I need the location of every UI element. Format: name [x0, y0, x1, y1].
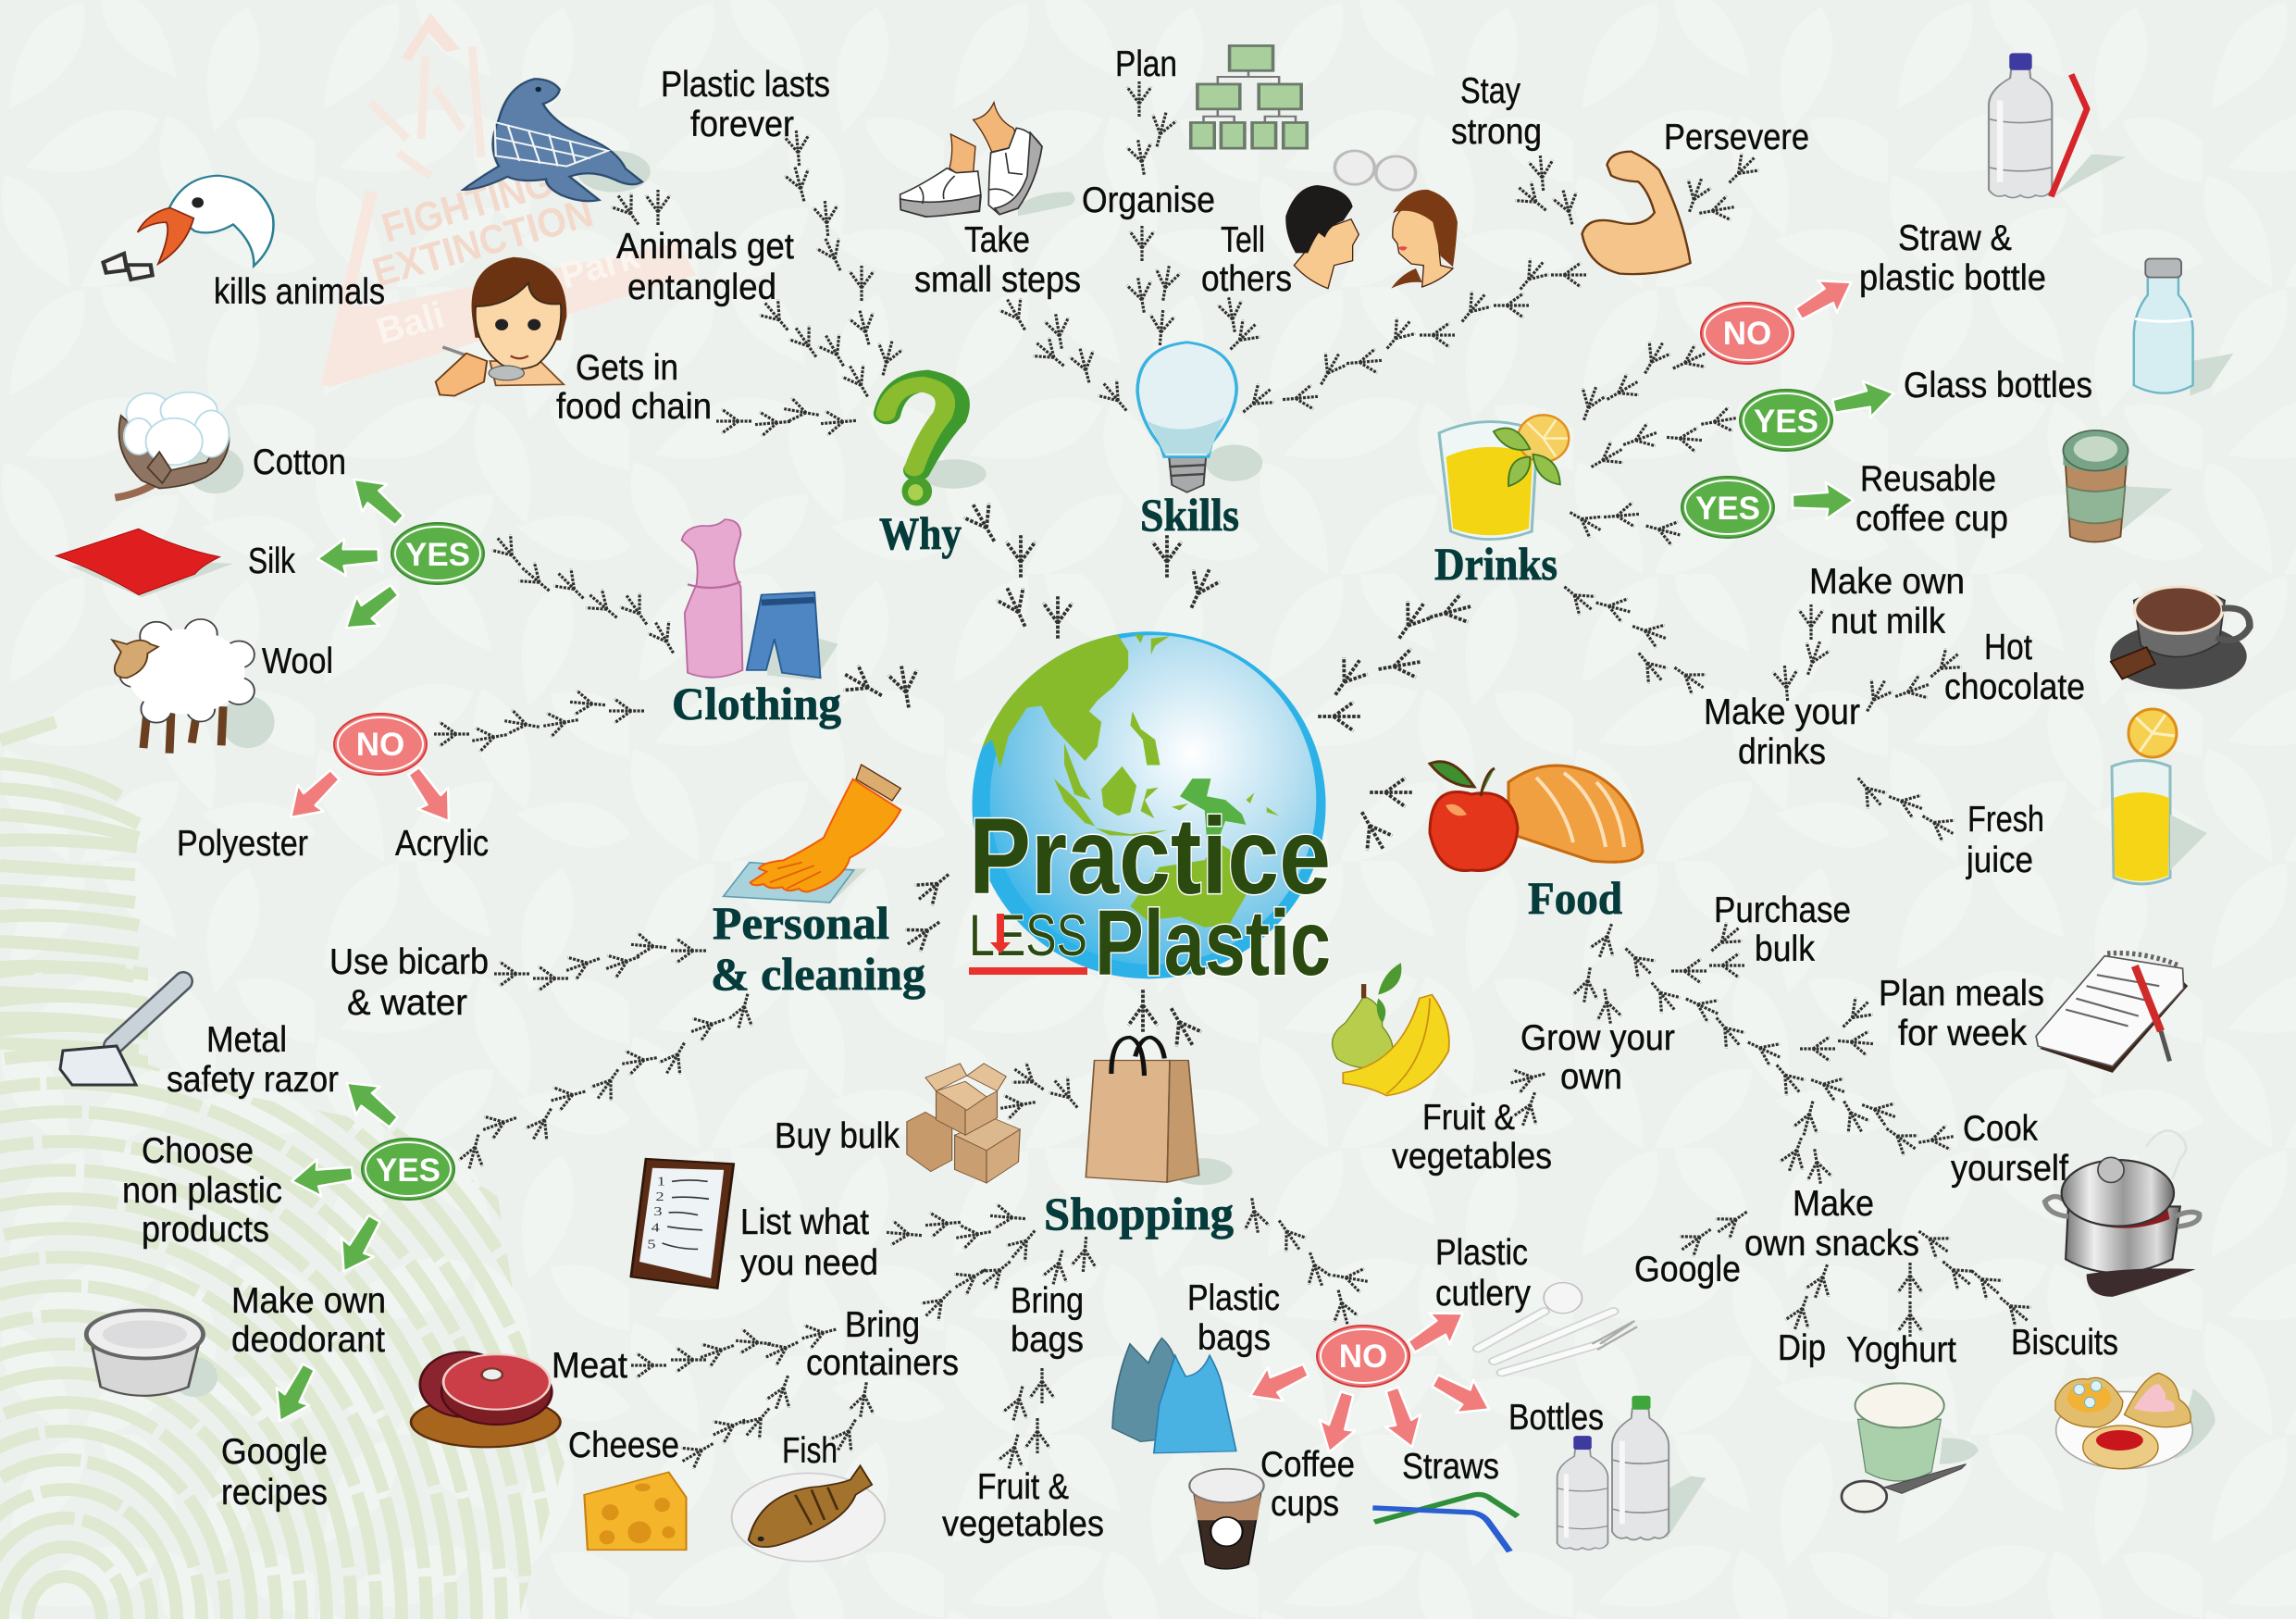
heading: Why: Why	[879, 507, 962, 559]
icon: cooking pot	[2045, 1131, 2200, 1297]
heading: Food: Food	[1528, 872, 1622, 924]
badge: yes	[391, 523, 484, 584]
labels: personal and cleaning: recipes	[221, 1473, 328, 1513]
icon: two people talking	[1285, 185, 1458, 289]
labels: shopping: vegetables	[942, 1504, 1104, 1544]
heading: Drinks: Drinks	[1434, 538, 1558, 590]
heading: Personal and cleaning: Personal	[713, 897, 889, 949]
labels: personal and cleaning: products	[142, 1210, 269, 1250]
labels: skills: Take	[964, 220, 1030, 260]
arrows and badges: personal care	[264, 1068, 454, 1430]
labels: personal and cleaning: Use bicarb	[329, 942, 489, 982]
labels: food: Purchase	[1714, 890, 1851, 930]
icon: paper shopping bag	[1086, 1038, 1233, 1185]
park logo watermark: FIGHTING	[377, 159, 558, 252]
label: animals get entangled: entangled	[627, 268, 776, 307]
icon: clipboard list: 5	[647, 1236, 656, 1252]
labels: skills: Persevere	[1664, 118, 1809, 157]
icon: organisation chart	[1191, 45, 1307, 148]
labels: drinks: chocolate	[1944, 667, 2085, 707]
heading: Personal and cleaning	[711, 897, 925, 1000]
labels: food: vegetables	[1392, 1137, 1552, 1177]
icon: drinks glass	[1439, 415, 1569, 540]
labels: shopping	[552, 1116, 1604, 1544]
footprints: drinks branches	[1557, 337, 1966, 844]
labels: skills: strong	[1451, 112, 1542, 152]
labels: drinks: Glass bottles	[1904, 366, 2092, 405]
labels: shopping: containers	[806, 1343, 959, 1383]
label: plastic lasts forever: Plastic lasts	[661, 65, 830, 105]
footprints: skills branches	[997, 81, 1763, 421]
labels: shopping: Plastic	[1187, 1278, 1280, 1318]
labels: personal and cleaning: safety razor	[167, 1060, 339, 1100]
footprints: why branches	[608, 130, 903, 437]
labels: food: Google	[1634, 1250, 1741, 1289]
labels: shopping: Bring	[845, 1305, 920, 1345]
footprints: clothing branches	[434, 530, 684, 753]
labels: clothing: Polyester	[177, 824, 308, 864]
heading: Personal and cleaning: & cleaning	[711, 948, 925, 1000]
labels: personal and cleaning: deodorant	[231, 1320, 385, 1360]
labels: drinks: Reusable	[1860, 459, 1996, 499]
title: Practice: Practice	[969, 795, 1331, 916]
arrow to acrylic	[399, 760, 464, 832]
icon: glass milk bottle	[2134, 259, 2233, 396]
label: kills animals: kills animals	[214, 272, 385, 312]
icon: disposable coffee cup	[1189, 1469, 1264, 1569]
labels: personal and cleaning	[122, 942, 489, 1513]
arrow to polyester	[278, 762, 348, 830]
labels: food: Plan meals	[1879, 974, 2044, 1014]
fingerprint watermark	[0, 722, 627, 1619]
labels: shopping: bags	[1011, 1320, 1084, 1360]
labels: clothing: Silk	[248, 542, 295, 581]
labels: shopping: Bottles	[1508, 1398, 1604, 1438]
label: animals get entangled: Animals get	[616, 227, 794, 267]
globe sphere	[972, 631, 1326, 978]
badge: no: NO	[1723, 316, 1771, 352]
labels: why	[214, 65, 830, 427]
arrow to straw	[1789, 267, 1861, 330]
labels: personal and cleaning: Make own	[231, 1281, 386, 1321]
icon: cardboard boxes	[907, 1064, 1020, 1183]
arrow to cutlery	[1401, 1298, 1473, 1363]
labels: food: Grow your	[1520, 1018, 1675, 1058]
labels: shopping: Coffee	[1260, 1445, 1355, 1485]
arrow to coffee cup	[1793, 481, 1854, 520]
labels: shopping: Buy bulk	[775, 1116, 900, 1156]
icon: seal in net	[464, 79, 651, 201]
icon: plastic bottle and straw	[1989, 53, 2127, 198]
labels: personal and cleaning: non plastic	[122, 1171, 282, 1211]
badge: yes lower	[1682, 477, 1774, 538]
labels: personal and cleaning: & water	[347, 983, 467, 1023]
icon: straws	[1372, 1494, 1518, 1551]
label: plastic lasts forever	[661, 65, 830, 144]
icon: biscuits	[2055, 1373, 2215, 1469]
icon: yoghurt	[1842, 1383, 1979, 1512]
labels: drinks: drinks	[1738, 732, 1826, 772]
icon: deodorant jar	[86, 1311, 217, 1397]
labels: skills: others	[1201, 259, 1292, 299]
labels: drinks	[1704, 218, 2092, 880]
arrow to deodorant	[328, 1209, 391, 1281]
footprints: personal and cleaning branches	[458, 932, 759, 1172]
labels: skills: small steps	[914, 260, 1081, 300]
labels: food: yourself	[1951, 1149, 2068, 1189]
label: gets in food chain: Gets in	[576, 348, 678, 388]
badge: yes	[362, 1139, 454, 1200]
badge: no	[334, 714, 427, 775]
labels: food: Dip	[1778, 1328, 1826, 1368]
labels: skills	[914, 44, 1809, 300]
arrow to cotton	[341, 466, 412, 534]
labels: personal and cleaning: Choose	[142, 1131, 254, 1171]
badge: yes upper	[1740, 390, 1832, 451]
icon: pear and bananas	[1333, 963, 1449, 1096]
labels: food: for week	[1898, 1014, 2027, 1053]
labels: food: Yoghurt	[1846, 1330, 1956, 1370]
icon: speech bubbles	[1334, 151, 1416, 190]
footprints: shopping branches	[631, 1059, 1370, 1472]
icon: clipboard list: 3	[653, 1203, 663, 1219]
labels: shopping: List what	[740, 1202, 869, 1242]
labels: shopping: bags	[1198, 1318, 1271, 1358]
icon: plastic bottles	[1558, 1396, 1706, 1550]
labels: food: bulk	[1755, 929, 1815, 969]
label: gets in food chain: food chain	[556, 387, 712, 427]
arrow to glass bottles	[1831, 376, 1897, 424]
title: Plastic: Plastic	[1095, 891, 1331, 995]
badge: no: NO	[356, 727, 404, 763]
heading: Shopping: Shopping	[1044, 1188, 1234, 1239]
continents	[982, 634, 1279, 928]
icon: boy eating	[436, 257, 566, 396]
labels: drinks: juice	[1966, 841, 2033, 880]
icon: reusable coffee cup	[2063, 430, 2173, 542]
arrows and badges: shopping	[1243, 1298, 1498, 1457]
labels: food: Cook	[1963, 1109, 2038, 1149]
labels: shopping: cutlery	[1435, 1274, 1531, 1314]
labels: shopping: you need	[740, 1243, 878, 1283]
labels: clothing: Wool	[262, 641, 333, 681]
labels: shopping: Cheese	[568, 1426, 679, 1465]
badge: no: NO	[1339, 1339, 1387, 1375]
labels: food: own	[1560, 1057, 1622, 1097]
labels: shopping: Straws	[1402, 1447, 1499, 1487]
badge: no	[1317, 1326, 1409, 1387]
arrow to plastic bags	[1243, 1353, 1313, 1413]
arrow to recipes	[264, 1358, 325, 1430]
labels: skills: Organise	[1082, 181, 1215, 220]
labels: clothing: Cotton	[253, 442, 346, 482]
footprints: hub to globe	[838, 497, 1474, 1052]
labels: drinks: Make own	[1809, 562, 1965, 602]
arrow to razor	[335, 1068, 405, 1137]
icon: flexed arm	[1582, 152, 1691, 274]
icon: clipboard list: 4	[652, 1220, 660, 1235]
icon: fish on plate	[732, 1465, 885, 1562]
labels: shopping: cups	[1271, 1484, 1339, 1524]
labels: shopping: Meat	[552, 1346, 627, 1386]
icon: silk cloth	[56, 529, 233, 597]
arrow to bottles	[1426, 1364, 1498, 1426]
title: LESS with arrow and underline: LESS	[969, 903, 1087, 968]
labels: drinks: nut milk	[1831, 602, 1945, 641]
arrows and badges: drinks	[1682, 267, 1897, 538]
labels: drinks: plastic bottle	[1859, 258, 2046, 298]
island fingerprint	[1180, 778, 1246, 842]
footprints: food branches	[1508, 919, 2035, 1337]
labels: shopping: Bring	[1011, 1281, 1084, 1321]
labels: food: Biscuits	[2011, 1323, 2118, 1363]
label: animals get entangled	[616, 227, 794, 307]
icon: sheep	[112, 619, 275, 753]
icon: apple and bread	[1430, 762, 1643, 870]
badge: yes upper: YES	[1754, 404, 1818, 440]
icon: meat on board	[411, 1351, 560, 1447]
arrow to non plastic products	[290, 1155, 354, 1200]
labels: personal and cleaning: Google	[221, 1432, 328, 1472]
labels: drinks: Make your	[1704, 692, 1860, 732]
heading: Clothing: Clothing	[672, 678, 841, 729]
icon: gull	[104, 176, 274, 280]
labels: clothing	[177, 442, 489, 864]
labels: personal and cleaning: Metal	[206, 1020, 287, 1060]
labels: clothing: Acrylic	[395, 824, 489, 864]
badge: no	[1701, 303, 1793, 364]
labels: shopping: Plastic	[1435, 1233, 1528, 1273]
labels: drinks: Straw &	[1898, 218, 2012, 258]
icon: cheese	[584, 1472, 686, 1550]
icon: plastic cutlery	[1478, 1283, 1637, 1373]
labels: drinks: Fresh	[1967, 800, 2044, 840]
label: gets in food chain	[556, 348, 712, 427]
icon: clipboard list: 2	[656, 1189, 664, 1203]
icon: razor	[60, 981, 183, 1085]
park logo watermark: Park	[555, 235, 645, 297]
labels: food	[1392, 890, 2118, 1370]
icon: clipboard list	[631, 1159, 734, 1289]
icon: shoes	[900, 103, 1075, 217]
icon: orange glove on cloth	[724, 765, 900, 903]
icon: juice and lemon	[2112, 709, 2207, 884]
globe	[957, 627, 1326, 978]
labels: drinks: coffee cup	[1855, 499, 2008, 539]
labels: drinks: Hot	[1984, 628, 2032, 667]
arrow to straws	[1374, 1383, 1430, 1453]
badge: yes: YES	[405, 537, 470, 573]
icon: dress and shorts	[682, 519, 838, 680]
badge: yes lower: YES	[1695, 491, 1760, 527]
labels: food: own snacks	[1744, 1224, 1919, 1264]
labels: skills: Stay	[1460, 71, 1520, 111]
icon: question mark	[886, 380, 987, 505]
arrow to coffee cups	[1311, 1389, 1365, 1457]
badge: yes: YES	[376, 1152, 441, 1189]
heading: Skills: Skills	[1140, 489, 1239, 541]
labels: shopping: Fruit &	[977, 1467, 1069, 1507]
icon: cotton	[115, 392, 243, 498]
icon: light bulb	[1137, 342, 1262, 492]
arrow to silk	[316, 537, 379, 578]
icon: notepad and pen	[2036, 953, 2188, 1073]
park logo watermark	[321, 13, 696, 387]
labels: shopping: Fish	[782, 1431, 838, 1471]
label: plastic lasts forever: forever	[690, 105, 794, 144]
icon: hot chocolate	[2110, 587, 2250, 689]
arrow to wool	[335, 576, 405, 642]
labels: skills: Tell	[1221, 220, 1265, 260]
globe highlight	[990, 635, 1316, 965]
park logo watermark: Bali	[372, 294, 449, 353]
labels: food: Fruit &	[1422, 1098, 1515, 1138]
labels: skills: Plan	[1115, 44, 1177, 84]
arrows and badges: clothing	[278, 466, 484, 832]
labels: food: Make	[1793, 1184, 1874, 1224]
park logo watermark: EXTINCTION	[367, 190, 598, 296]
icon: plastic bags	[1112, 1339, 1236, 1453]
icon: clipboard list: 1	[657, 1174, 665, 1189]
